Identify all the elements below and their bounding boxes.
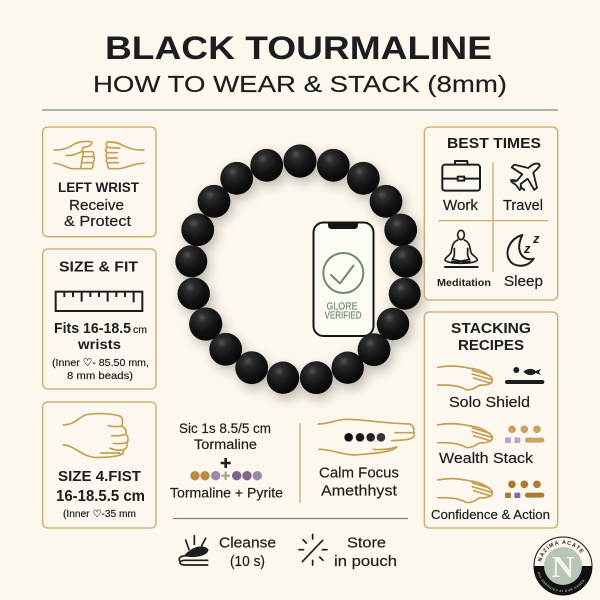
recipe: calm focus amethyst: Amethhyst [321, 483, 398, 500]
fit text: Fits 16-18.5 [54, 321, 131, 337]
panel: best times [424, 127, 558, 300]
panel: size and fit: wrists [77, 336, 121, 352]
brand logo [534, 536, 592, 596]
icon: sleep z letters: z [532, 231, 540, 246]
size line: Sic 1s 8.5/5 cm [179, 421, 271, 436]
label: work: Work [443, 198, 479, 214]
bead row [190, 471, 262, 480]
recipe label: Tormaline + Pyrite [170, 485, 283, 501]
care: store in pouch: in pouch [334, 554, 397, 570]
heading: SIZE & FIT [59, 260, 138, 276]
label: Calm Focus [319, 465, 399, 482]
recipe: confidence and action [438, 479, 544, 503]
verified text [324, 302, 362, 322]
recipe: calm focus amethyst [318, 419, 414, 500]
icon: cleanse [179, 536, 208, 565]
phone: Glore verified [314, 222, 374, 336]
label: meditation: Meditation [437, 277, 491, 289]
subheading: HOW TO WEAR & STACK (8mm) [93, 71, 507, 97]
icon: sparkle slash [299, 534, 327, 565]
description: Receive [69, 198, 124, 214]
panel: left wrist [43, 127, 156, 237]
logo ring text: NAZIMA ACATE [538, 540, 584, 562]
panel: stacking recipes [424, 312, 558, 528]
recipe: tormaline plus pyrite [170, 421, 283, 501]
icon: sleep z letters [523, 231, 540, 256]
label: confidence and action: Confidence & Action [431, 508, 550, 522]
label: SIZE 4.FIST [58, 469, 141, 485]
tormaline label: Tormaline [194, 437, 257, 452]
care: cleanse: (10 s) [230, 554, 265, 570]
inner note: (Inner ♡-35 mm [63, 509, 136, 520]
measurement: 16-18.5.5 cm [56, 488, 145, 505]
label: Store [347, 536, 386, 552]
panel: size and fit: 8 mm beads) [67, 370, 133, 382]
bracelet beads [175, 144, 422, 394]
panel: size and fit [43, 249, 156, 389]
label: travel: Travel [503, 198, 543, 214]
icon: wrist with beads [318, 419, 414, 455]
label: sleep: Sleep [504, 273, 543, 290]
plus sign [221, 458, 231, 468]
verified text: GLORE [326, 302, 358, 312]
verified text: VERIFIED [324, 310, 362, 322]
brand logo: ALL ENERGIES AT OUR HANDS [538, 572, 584, 592]
main heading: BLACK TOURMALINE [105, 30, 492, 66]
label: wealth stack: Wealth Stack [439, 450, 534, 467]
icon: airplane [511, 164, 540, 190]
heading: STACKING [451, 321, 531, 337]
label: solo shield: Solo Shield [449, 394, 530, 411]
icon: crescent moon [508, 235, 534, 266]
icon: ruler [56, 292, 142, 311]
icon: briefcase [442, 161, 480, 191]
label: LEFT WRIST [58, 180, 140, 195]
recipe: solo shield [438, 366, 544, 390]
panel: left wrist: & Protect [64, 214, 131, 230]
panel: stacking recipes: RECIPES [458, 338, 524, 354]
care: store in pouch [299, 534, 397, 570]
panel: size fist [43, 402, 156, 528]
bracelet shadow [178, 150, 425, 399]
heading: BEST TIMES [447, 136, 541, 152]
icon: fist [63, 414, 128, 457]
logo letter: N [552, 549, 574, 584]
phone notch [328, 223, 358, 229]
panel: size and fit: cm [133, 325, 147, 336]
inner diameter note: (Inner ♡- 85.50 mm, [52, 357, 149, 369]
recipe: wealth stack [438, 424, 544, 448]
title [93, 30, 507, 97]
icon: meditation figure [445, 230, 478, 267]
icon: sleep z letters: z [523, 241, 531, 256]
icon: check circle [323, 253, 363, 293]
care: cleanse [179, 536, 276, 570]
icon: two fists [54, 141, 144, 169]
label: Cleanse [219, 536, 276, 552]
